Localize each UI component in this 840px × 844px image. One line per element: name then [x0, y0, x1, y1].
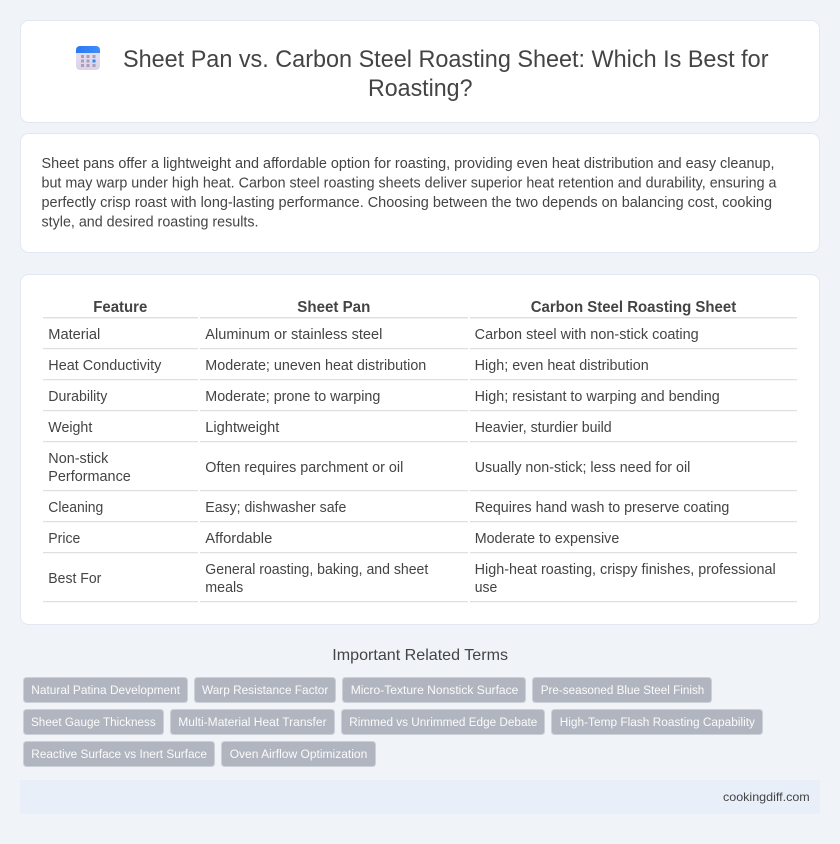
row: weight: Lightweight	[205, 420, 279, 436]
tag: Natural Patina Development	[31, 683, 181, 697]
row: durability: Durability	[48, 389, 108, 405]
tag: Oven Airflow Optimization	[230, 747, 367, 761]
tag: Rimmed vs Unrimmed Edge Debate	[349, 715, 537, 729]
row: durability: Moderate; prone to warping	[205, 389, 380, 405]
table header row: Feature	[93, 299, 147, 316]
row: cleaning: Cleaning	[48, 500, 103, 516]
tag: Multi-Material Heat Transfer	[178, 715, 327, 729]
title	[123, 46, 768, 102]
table header row	[93, 299, 737, 316]
row: weight: Weight	[48, 420, 92, 436]
tag	[24, 710, 164, 734]
tag	[222, 742, 376, 766]
row: durability: High; resistant to warping and bending	[475, 389, 720, 405]
footer: cookingdiff.com	[723, 790, 810, 804]
table header row: Sheet Pan	[297, 299, 370, 316]
tag	[194, 678, 336, 702]
text block: summary paragraph: but may warp under high heat. Carbon steel roasting sheets deliver superior heat retention and durability, ensuring a	[42, 176, 777, 192]
row: best for: use	[475, 580, 497, 596]
panel: description	[20, 134, 820, 252]
row: non-stick performance: Usually non-stick; less need for oil	[475, 460, 690, 476]
tag: High-Temp Flash Roasting Capability	[560, 715, 756, 729]
tag	[170, 710, 334, 734]
title: Roasting?	[368, 75, 472, 102]
row: durability	[48, 389, 720, 405]
row: material: Material	[48, 327, 100, 343]
text block: summary paragraph	[42, 156, 777, 230]
row: price	[48, 531, 619, 547]
row: non-stick performance	[48, 451, 690, 485]
title: Sheet Pan vs. Carbon Steel Roasting Sheet: Which Is Best for	[123, 46, 768, 73]
row: heat conductivity: Moderate; uneven heat distribution	[205, 358, 426, 374]
row: heat conductivity: Heat Conductivity	[48, 358, 162, 374]
table header row: Carbon Steel Roasting Sheet	[531, 299, 737, 316]
tag: Pre-seasoned Blue Steel Finish	[541, 683, 704, 697]
row: heat conductivity	[48, 358, 649, 374]
row: best for: High-heat roasting, crispy finishes, professional	[475, 562, 776, 578]
text block: summary paragraph: perfectly crisp roast with long-lasting performance. Choosing between the two depends on balancing cost, cooking	[42, 195, 772, 211]
row: non-stick performance: Often requires parchment or oil	[205, 460, 403, 476]
row: material: Aluminum or stainless steel	[205, 327, 382, 343]
panel: comparison table	[20, 274, 820, 624]
tag	[342, 710, 544, 734]
tag: Reactive Surface vs Inert Surface	[31, 747, 207, 761]
row: weight: Heavier, sturdier build	[475, 420, 612, 436]
row: price: Moderate to expensive	[475, 531, 619, 547]
row: best for: General roasting, baking, and sheet	[205, 562, 428, 578]
heading: important related terms: Important Related Terms	[332, 647, 508, 664]
row: best for: Best For	[48, 571, 102, 587]
text block: summary paragraph: Sheet pans offer a lightweight and affordable option for roasting, providing even heat distribution and easy cleanup,	[42, 156, 774, 172]
row: material	[48, 327, 699, 343]
text block: summary paragraph: style, and desired roasting results.	[42, 214, 258, 230]
icon: calendar	[76, 46, 100, 70]
row: weight	[48, 420, 612, 436]
row: cleaning: Requires hand wash to preserve coating	[475, 500, 729, 516]
row: best for: meals	[205, 580, 243, 596]
tag: Micro-Texture Nonstick Surface	[351, 683, 519, 697]
row: price: Price	[48, 531, 80, 547]
row: non-stick performance: Performance	[48, 469, 131, 485]
footer	[20, 780, 820, 814]
related term tags	[24, 678, 762, 766]
panel: title header	[20, 20, 820, 122]
row: non-stick performance: Non-stick	[48, 451, 109, 467]
tag: Sheet Gauge Thickness	[31, 715, 156, 729]
tag	[24, 742, 214, 766]
row: best for	[48, 562, 776, 596]
tag	[532, 678, 712, 702]
tag	[552, 710, 762, 734]
row: price: Affordable	[205, 531, 272, 547]
row: material: Carbon steel with non-stick coating	[475, 327, 699, 343]
row: cleaning	[48, 500, 729, 516]
tag: Warp Resistance Factor	[202, 683, 328, 697]
row: cleaning: Easy; dishwasher safe	[205, 500, 346, 516]
row: heat conductivity: High; even heat distribution	[475, 358, 649, 374]
tag	[342, 678, 526, 702]
tag	[24, 678, 188, 702]
